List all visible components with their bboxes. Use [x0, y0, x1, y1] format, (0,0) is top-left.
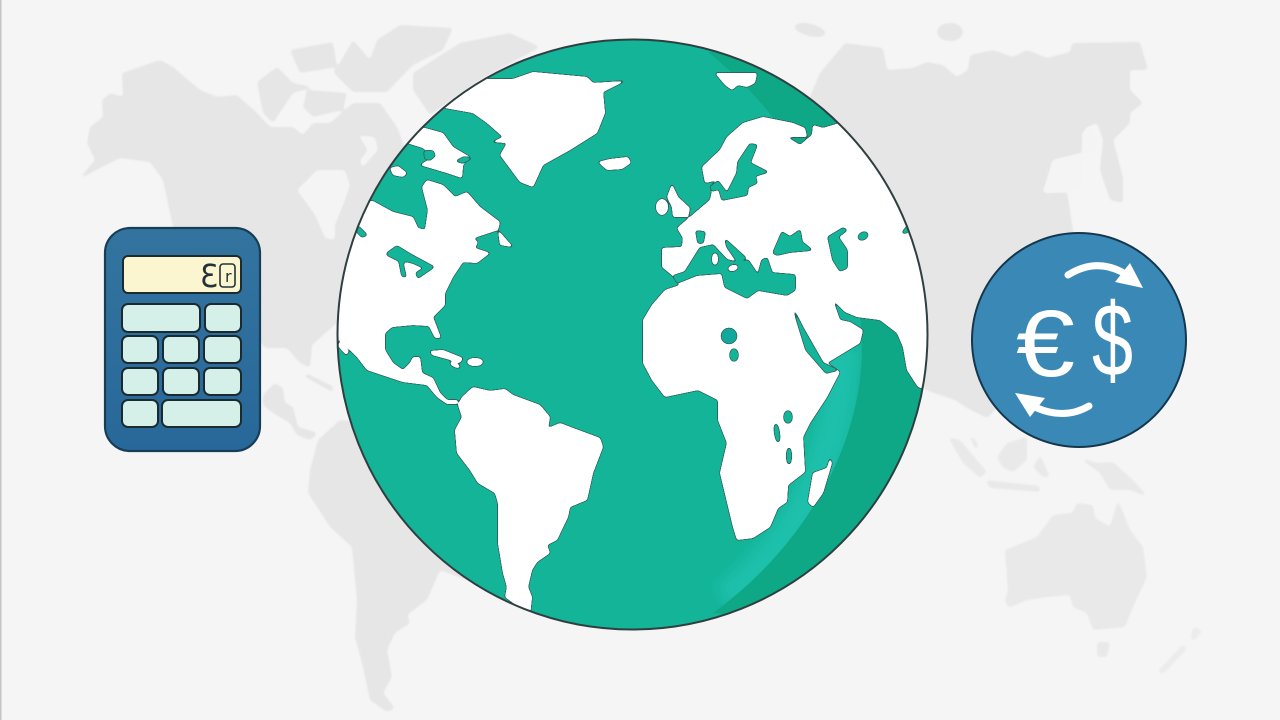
icon: calculator	[105, 228, 260, 451]
map: Eurasia	[800, 42, 1148, 418]
continents	[338, 71, 926, 610]
land: Great Britain	[667, 184, 690, 217]
water: Great Lakes	[387, 246, 434, 278]
land: Madagascar	[808, 458, 832, 507]
calculator display digits	[200, 257, 235, 295]
land: Canadian Arctic islands	[400, 128, 470, 178]
globe shaded crescent	[708, 52, 922, 614]
land: Jamaica	[449, 361, 461, 369]
map: Tasmania	[1097, 642, 1110, 657]
dollar symbol: $	[1092, 283, 1133, 399]
globe	[336, 38, 928, 630]
map: Greenland	[413, 33, 540, 115]
map: New Zealand	[1157, 627, 1203, 674]
land: small Arctic island	[390, 166, 407, 177]
map: Central America	[263, 374, 334, 440]
calculator body	[105, 228, 260, 451]
water: East African lakes	[774, 411, 792, 464]
water: Lake Chad	[722, 328, 738, 361]
land: Svalbard	[715, 73, 757, 90]
arrow: bottom clockwise	[1015, 393, 1089, 417]
land: Ireland	[656, 199, 668, 215]
water: Baltic Sea	[710, 144, 768, 200]
globe highlight band	[725, 347, 842, 600]
left edge line	[0, 0, 2, 720]
arrow: top clockwise	[1068, 263, 1143, 288]
map: Australia	[1005, 500, 1147, 630]
map: South America	[308, 420, 520, 712]
calculator display digits: r	[225, 267, 232, 286]
water: Adriatic Sea	[725, 239, 746, 263]
land: Iceland	[598, 157, 631, 170]
water: Black Sea	[773, 230, 812, 255]
water: Red Sea	[793, 308, 838, 373]
calculator display digits: Ɛ	[200, 257, 218, 295]
water: Caspian Sea	[828, 228, 847, 271]
map: Arctic Russia islands	[793, 20, 963, 41]
inland waters	[357, 144, 911, 464]
calculator display	[123, 256, 241, 293]
water: Arctic inlet	[456, 157, 472, 163]
water: western lake	[357, 226, 367, 237]
land: Eurasia and Africa	[643, 100, 960, 540]
water: Arctic hole	[424, 151, 435, 160]
water: Mediterranean Sea	[673, 245, 795, 298]
water: Arctic lake	[902, 225, 911, 233]
water: Aral Sea	[858, 232, 868, 240]
calculator keys	[122, 304, 241, 427]
land: Hispaniola	[467, 358, 483, 366]
land: Greenland	[444, 71, 624, 188]
map: North America	[78, 60, 500, 368]
map: inland seas	[297, 130, 1097, 240]
land: Cuba	[430, 350, 463, 363]
land: South America	[455, 387, 603, 615]
land: North and Central America	[338, 180, 512, 406]
map: Southeast Asia islands	[948, 432, 1148, 497]
icon: currency exchange	[972, 233, 1186, 447]
currency circle	[972, 233, 1186, 447]
land: Baja sliver	[338, 341, 349, 355]
globe outline	[338, 40, 928, 630]
land: Corsica and Sicily	[712, 253, 739, 272]
map: Arctic islands	[257, 25, 453, 123]
euro symbol: €	[1016, 291, 1075, 397]
water: Bay of Biscay	[696, 231, 705, 243]
globe ocean	[338, 40, 928, 630]
